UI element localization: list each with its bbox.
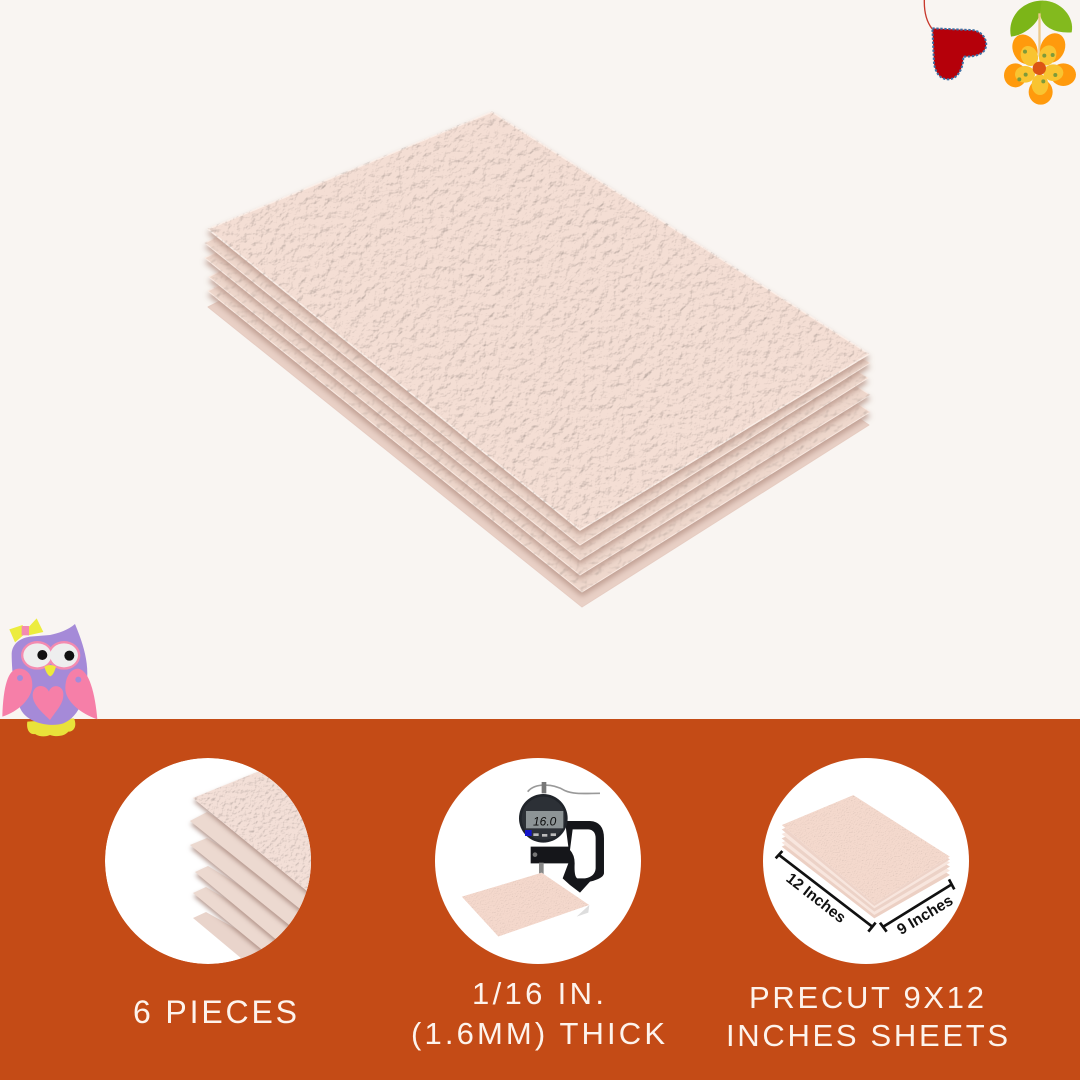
label: sheet size second line: INCHES SHEETS xyxy=(726,1018,1008,1053)
orange band xyxy=(0,719,1080,1080)
label: 6 pieces: 6 PIECES xyxy=(133,994,297,1030)
icon: felt owl xyxy=(2,618,97,736)
main felt sheet stack xyxy=(205,112,870,607)
label: thickness second line: (1.6MM) THICK xyxy=(411,1016,665,1051)
panel: thickness xyxy=(411,758,665,1051)
dimension label: 9 inches: 9 Inches xyxy=(894,892,956,939)
icon: red felt heart xyxy=(924,0,986,79)
label: thickness: 1/16 IN. xyxy=(472,976,604,1011)
icon circle background xyxy=(763,758,969,964)
icon: orange felt flower with leaves xyxy=(1004,1,1076,105)
panel: sheet size xyxy=(726,758,1008,1053)
icon circle: stacked sheets close-up xyxy=(105,758,311,964)
panel: 6 pieces xyxy=(105,758,311,1024)
label: sheet size: PRECUT 9X12 xyxy=(749,980,984,1015)
dimension label: 12 inches: 12 Inches xyxy=(783,870,849,927)
icon: thickness gauge on a felt sheet xyxy=(462,782,604,937)
icon: thickness gauge on a felt sheet: 16.0 xyxy=(533,814,557,828)
icon: small sheet stack with dimensions xyxy=(776,795,954,932)
icon circle background xyxy=(435,758,641,964)
top felt sheet xyxy=(208,112,869,530)
